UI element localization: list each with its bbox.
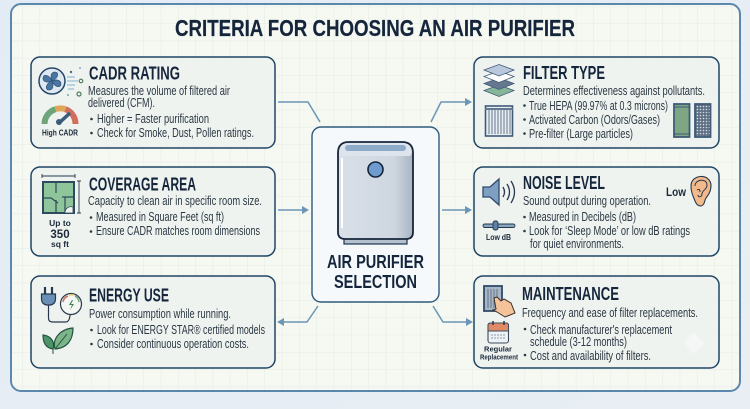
panel: energy use	[31, 276, 275, 368]
description	[88, 84, 230, 110]
icon: low dB slider	[483, 221, 515, 230]
description: Power consumption while running.	[89, 307, 231, 321]
coverage label: sq ft	[51, 239, 69, 249]
faint sparkle	[684, 332, 704, 354]
bullet list: for quiet environments.	[530, 237, 624, 251]
bullet list: True HEPA (99.97% at 0.3 microns)	[529, 99, 668, 113]
bullet list: Check manufacturer's replacement	[530, 323, 672, 337]
bullet list: Ensure CADR matches room dimensions	[96, 224, 260, 238]
icon: speaker	[483, 179, 514, 205]
coverage label	[49, 218, 71, 249]
icon: plug and meter	[42, 287, 82, 322]
icon: floor plan	[42, 174, 81, 213]
panel: maintenance	[474, 276, 719, 368]
bullet list: Check for Smoke, Dust, Pollen ratings.	[97, 126, 254, 140]
icon: leaves	[43, 328, 73, 354]
icon: HEPA filter	[485, 106, 513, 136]
icon: air purifier	[338, 142, 413, 244]
calendar label	[480, 344, 518, 362]
panel: coverage area	[31, 167, 275, 256]
heading: CADR RATING	[89, 64, 180, 84]
arrow: coverage area to centre	[278, 206, 309, 214]
low label: Low	[666, 187, 686, 199]
coverage label: 350	[50, 229, 70, 241]
bullet list	[90, 112, 254, 140]
panel: filter type	[474, 57, 719, 148]
description: delivered (CFM).	[88, 96, 155, 110]
icon: filter with hand	[484, 286, 515, 317]
gauge label: High CADR	[42, 128, 78, 138]
arrow: centre to maintenance	[433, 306, 473, 326]
centre label: AIR PURIFIER	[327, 251, 424, 272]
bullet list: Look for ‘Sleep Mode’ or low dB ratings	[529, 224, 690, 238]
bullet list: Cost and availability of filters.	[530, 349, 651, 363]
panel: noise level	[474, 167, 719, 256]
icon: filter layers	[484, 64, 514, 96]
description: Capacity to clean air in specific room size.	[88, 194, 262, 208]
bullet list	[524, 323, 672, 363]
bullet list	[90, 323, 265, 351]
bullet list: schedule (3-12 months)	[530, 335, 627, 349]
heading: COVERAGE AREA	[89, 174, 196, 194]
description: Sound output during operation.	[523, 194, 651, 208]
arrow: centre to noise level	[442, 206, 472, 214]
arrow: CADR rating to centre	[278, 102, 320, 122]
bullet list: Higher = Faster purification	[97, 112, 209, 126]
heading: ENERGY USE	[89, 286, 169, 306]
bullet list: Pre-filter (Large particles)	[529, 127, 633, 141]
icon: carbon filter	[674, 104, 690, 137]
panel: centre air purifier selection	[312, 127, 439, 302]
calendar label: Regular	[484, 344, 512, 354]
title: CRITERIA FOR CHOOSING AN AIR PURIFIER	[175, 15, 575, 41]
icon: fan with airflow	[39, 67, 83, 96]
arrow: centre to filter type	[431, 98, 472, 122]
icon: ear	[691, 176, 711, 206]
panel: CADR rating	[31, 57, 275, 148]
calendar label: Replacement	[480, 352, 518, 362]
heading: NOISE LEVEL	[523, 173, 605, 193]
coverage label: Up to	[49, 218, 71, 228]
bullet list	[90, 210, 260, 238]
icon: pre-filter mesh	[695, 104, 710, 137]
bullet list: Look for ENERGY STAR® certified models	[97, 323, 265, 337]
icon: calendar	[488, 321, 508, 343]
heading: MAINTENANCE	[522, 284, 619, 304]
slider label: Low dB	[486, 232, 511, 242]
bullet list: Measured in Decibels (dB)	[529, 210, 636, 224]
bullet list: Consider continuous operation costs.	[97, 337, 249, 351]
centre label	[327, 251, 424, 292]
bullet list	[523, 210, 690, 251]
heading: FILTER TYPE	[523, 63, 605, 83]
bullet list: Activated Carbon (Odors/Gases)	[529, 113, 660, 127]
centre label: SELECTION	[334, 271, 417, 292]
bullet list: Measured in Square Feet (sq ft)	[96, 210, 224, 224]
icon: CADR gauge	[44, 108, 76, 125]
bullet list	[523, 99, 668, 141]
description: Measures the volume of filtered air	[88, 84, 230, 98]
arrow: centre to energy use	[277, 306, 318, 326]
